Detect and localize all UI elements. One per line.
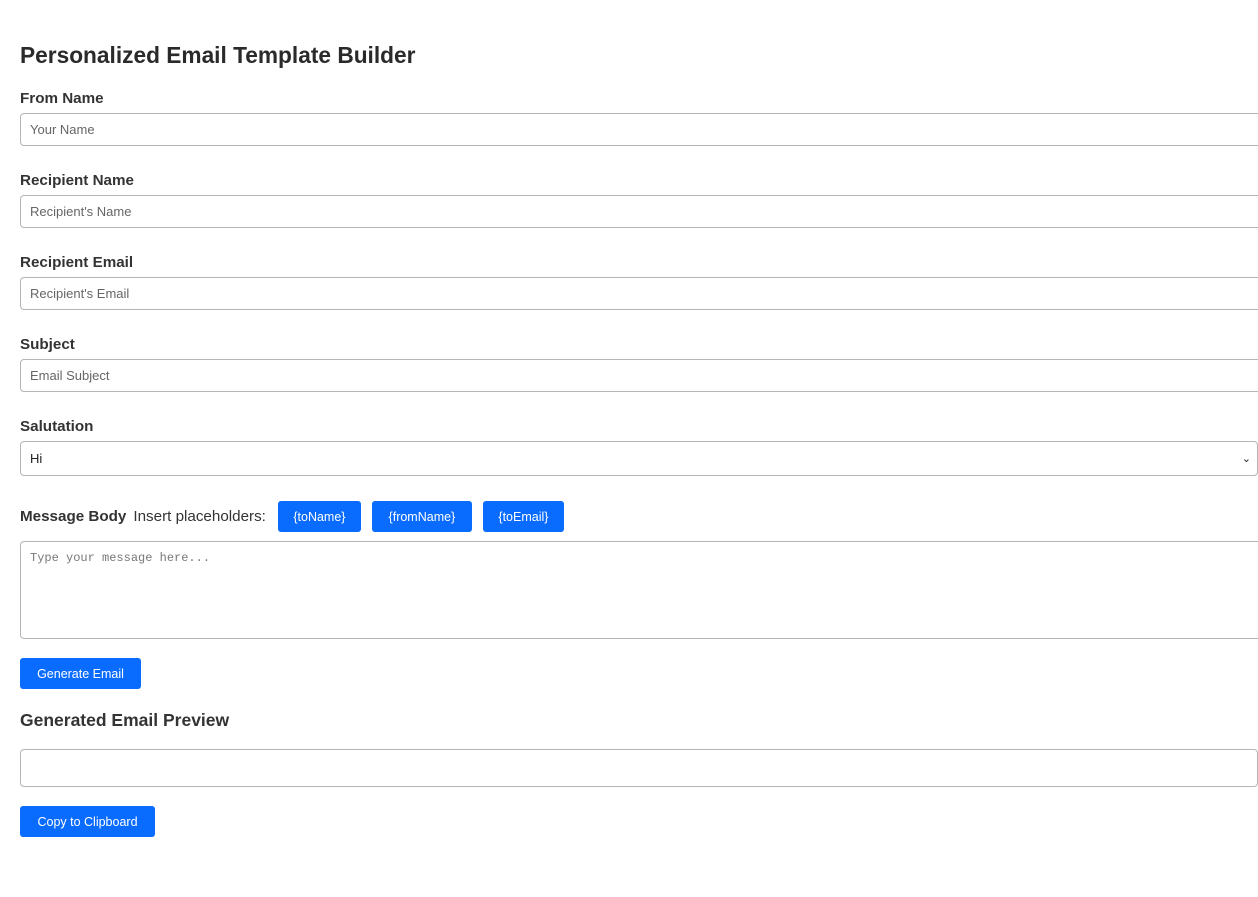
preview box <box>20 749 1258 787</box>
input: recipient email <box>20 277 1258 310</box>
button: fromName: {fromName} <box>389 510 455 524</box>
button: generate: Generate Email <box>37 666 124 680</box>
input: recipient email: Recipient's Email <box>30 286 129 301</box>
button: toName <box>278 501 361 532</box>
select: salutation <box>20 441 1258 476</box>
message body label row: Insert placeholders: <box>133 508 266 525</box>
message body label row <box>20 501 564 532</box>
select: salutation: ⌄ <box>1242 453 1251 465</box>
label: recipient email: Recipient Email <box>20 254 133 271</box>
button: fromName <box>372 501 472 532</box>
textarea: message <box>20 541 1258 639</box>
button: generate <box>20 658 141 689</box>
textarea: message: Type your message here... <box>30 551 210 565</box>
input: subject <box>20 359 1258 392</box>
input: recipient name <box>20 195 1258 228</box>
title: Personalized Email Template Builder <box>20 42 415 68</box>
button: toEmail: {toEmail} <box>498 510 548 524</box>
label: from name: From Name <box>20 90 104 107</box>
select: salutation: Hi <box>30 451 42 466</box>
message body label row: Message Body <box>20 508 126 525</box>
button: copy <box>20 806 155 837</box>
input: from name: Your Name <box>30 122 95 137</box>
button: toEmail <box>483 501 564 532</box>
button: copy: Copy to Clipboard <box>37 814 138 828</box>
heading: preview: Generated Email Preview <box>20 710 229 730</box>
input: recipient name: Recipient's Name <box>30 204 131 219</box>
button: toName: {toName} <box>293 510 345 524</box>
input: from name <box>20 113 1258 146</box>
label: recipient name: Recipient Name <box>20 172 134 189</box>
label: salutation: Salutation <box>20 418 93 435</box>
label: subject: Subject <box>20 336 75 353</box>
input: subject: Email Subject <box>30 368 109 383</box>
